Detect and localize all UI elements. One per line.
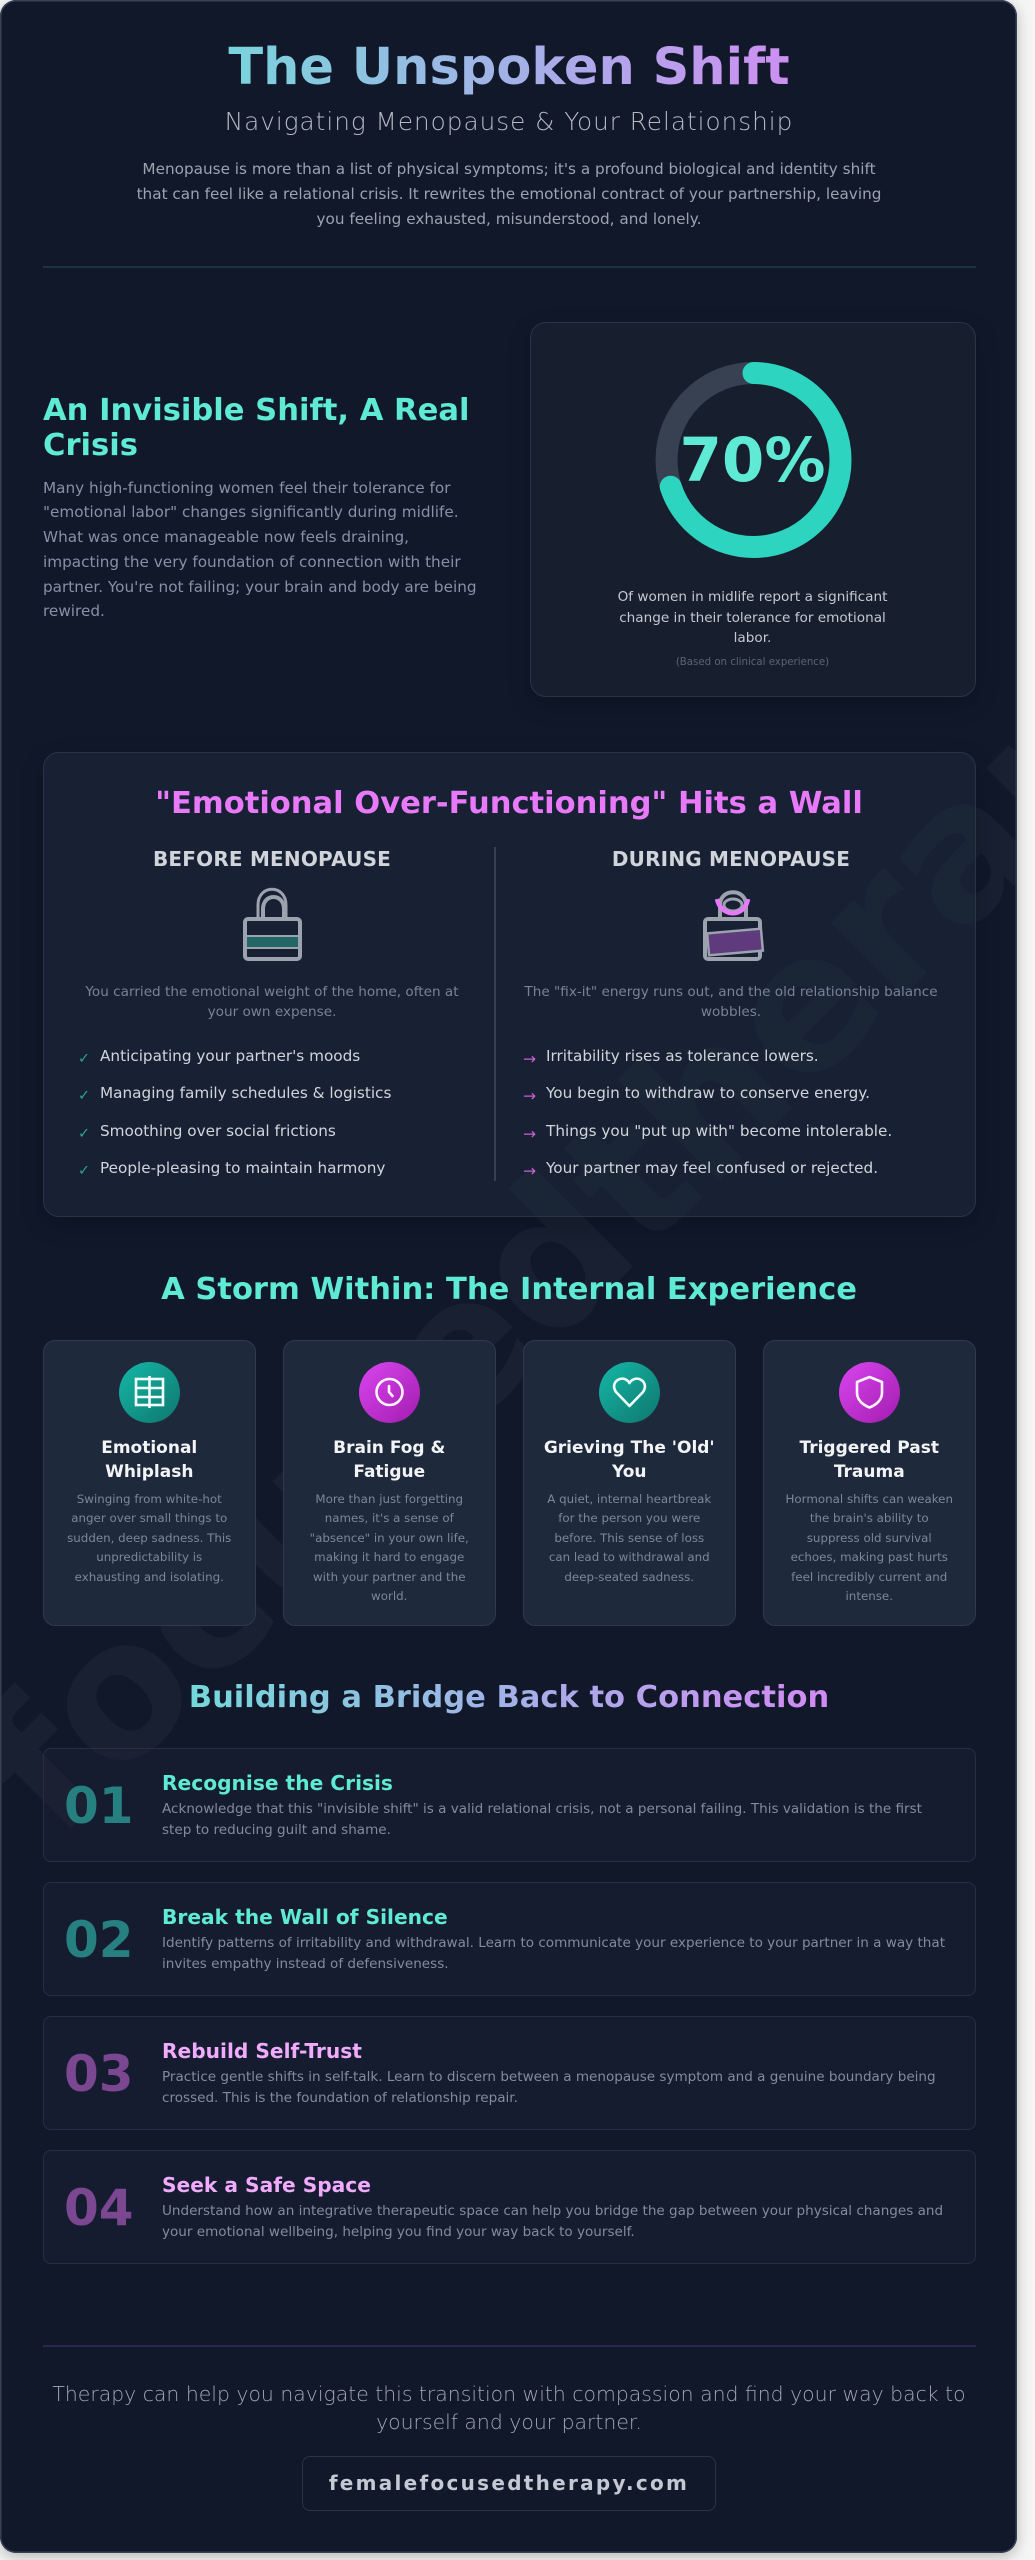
heading: building a bridge [43, 1678, 975, 1718]
title: The Unspoken Shift [228, 38, 790, 97]
card text [67, 1492, 231, 1584]
step text: Practice gentle shifts in self-talk. Learn to discern between a menopause symptom and a genuine boundary being [162, 2069, 936, 2085]
card text: before. This sense of loss [554, 1531, 704, 1545]
website button: femalefocusedtherapy.com [329, 2471, 689, 2495]
subtitle: Navigating Menopause & Your Relationship [225, 107, 793, 136]
step text: Understand how an integrative therapeutic space can help you bridge the gap between your physical changes and [162, 2203, 943, 2219]
step title: Recognise the Crisis [162, 1771, 393, 1795]
paragraph: invisible shift: What was once manageable now feels draining, [43, 528, 409, 546]
before description [85, 984, 459, 1020]
step title: Seek a Safe Space [162, 2173, 371, 2197]
card text: with your partner and the [313, 1570, 466, 1584]
card text [547, 1492, 711, 1584]
stat caption [618, 589, 888, 646]
step number: 03 [64, 2045, 134, 2103]
before heading: BEFORE MENOPAUSE [153, 847, 391, 871]
heading: invisible shift: Crisis [43, 428, 138, 462]
card title [333, 1438, 445, 1482]
list item: You begin to withdraw to conserve energy. [546, 1084, 870, 1102]
step text: Acknowledge that this "invisible shift" is a valid relational crisis, not a personal failing. This validation is the first [162, 1801, 922, 1817]
heading: building a bridge: Building a Bridge Back to Connection [189, 1680, 829, 1714]
heading: invisible shift [43, 392, 469, 462]
stat caption: Of women in midlife report a significant [618, 589, 887, 605]
closing message: yourself and your partner. [376, 2410, 642, 2434]
during list [523, 1047, 892, 1180]
list item: Smoothing over social frictions [100, 1122, 336, 1140]
step text: your emotional wellbeing, helping you find your way back to yourself. [162, 2224, 635, 2240]
step 04 [42, 2150, 976, 2264]
website button [302, 2456, 716, 2511]
list item: Your partner may feel confused or rejected. [546, 1159, 878, 1177]
card title [799, 1438, 939, 1482]
step text: step to reducing guilt and shame. [162, 1822, 391, 1838]
step number: 04 [64, 2179, 134, 2237]
stat caption: labor. [734, 630, 771, 646]
donut chart: 70% [679, 425, 825, 496]
intro paragraph: Menopause is more than a list of physical symptoms; it's a profound biological and identity shift [142, 160, 876, 178]
list item: → [523, 1125, 536, 1143]
card: trauma [762, 1340, 976, 1626]
during description: wobbles. [701, 1004, 761, 1020]
donut chart [656, 362, 852, 558]
card text: exhausting and isolating. [75, 1570, 224, 1584]
paragraph: invisible shift: partner. You're not failing; your brain and body are being [43, 578, 477, 596]
card text: A quiet, internal heartbreak [547, 1492, 711, 1506]
card text: the brain's ability to [810, 1511, 929, 1525]
card title: Fatigue [353, 1462, 425, 1482]
step title: Rebuild Self-Trust [162, 2039, 362, 2063]
list item: ✓ [78, 1088, 90, 1104]
list item: Irritability rises as tolerance lowers. [546, 1047, 819, 1065]
during heading: DURING MENOPAUSE [612, 847, 850, 871]
step number: 02 [64, 1911, 134, 1969]
list item: People-pleasing to maintain harmony [100, 1159, 385, 1177]
list item: ✓ [78, 1163, 90, 1179]
card title: Whiplash [105, 1462, 193, 1482]
list item: ✓ [78, 1126, 90, 1142]
card title: Brain Fog & [333, 1438, 445, 1458]
paragraph: invisible shift: impacting the very foundation of connection with their [43, 553, 461, 571]
intro paragraph: that can feel like a relational crisis. It rewrites the emotional contract of your partnership, leaving [137, 185, 881, 203]
heading: emotional over-functioning: "Emotional Over-Functioning" Hits a Wall [155, 786, 863, 821]
stat caption: change in their tolerance for emotional [619, 610, 886, 626]
panel: 70 percent stat [530, 322, 976, 697]
icon: during lock [703, 890, 764, 961]
card title [101, 1438, 197, 1482]
paragraph: invisible shift: Many high-functioning women feel their tolerance for [43, 478, 450, 496]
list item: → [523, 1050, 536, 1068]
step text [162, 1935, 945, 1972]
card text: echoes, making past hurts [791, 1550, 948, 1564]
card text: for the person you were [558, 1511, 700, 1525]
title [43, 36, 975, 100]
card text: intense. [846, 1589, 893, 1603]
card text: making it hard to engage [314, 1550, 464, 1564]
icon: clock [358, 1362, 420, 1423]
card title: Trauma [834, 1462, 905, 1482]
heading: storm within: A Storm Within: The Internal Experience [161, 1272, 857, 1306]
heading: invisible shift: An Invisible Shift, A Real [43, 392, 469, 428]
card text: unpredictability is [96, 1550, 202, 1564]
step text: invites empathy instead of defensiveness. [162, 1956, 449, 1972]
paragraph: invisible shift: rewired. [43, 602, 105, 620]
step 03 [42, 2016, 976, 2130]
before description: your own expense. [208, 1004, 336, 1020]
column divider [494, 847, 496, 1181]
card text: anger over small things to [71, 1511, 227, 1525]
card: brain fog [282, 1340, 496, 1626]
paragraph: invisible shift [43, 478, 477, 620]
list item: ✓ [78, 1051, 90, 1067]
before description: You carried the emotional weight of the home, often at [85, 984, 459, 1000]
step text [162, 2069, 936, 2106]
card text: feel incredibly current and [791, 1570, 947, 1584]
paragraph: invisible shift: "emotional labor" changes significantly during midlife. [43, 503, 459, 521]
card text: deep-seated sadness. [564, 1570, 694, 1584]
panel: emotional over-functioning [42, 752, 976, 1217]
step text: Identify patterns of irritability and withdrawal. Learn to communicate your experience to your partner in a way that [162, 1935, 945, 1951]
step text [162, 1801, 922, 1838]
list item: Anticipating your partner's moods [100, 1047, 360, 1065]
card text: Swinging from white-hot [77, 1492, 222, 1506]
card text [786, 1492, 953, 1603]
card text: More than just forgetting [315, 1492, 463, 1506]
icon: before lock [243, 888, 302, 961]
card: emotional whiplash [42, 1340, 256, 1626]
step text [162, 2203, 943, 2240]
intro paragraph [137, 160, 881, 228]
card text: suppress old survival [807, 1531, 932, 1545]
during description [524, 984, 938, 1020]
step 02 [42, 1882, 976, 1996]
card text: can lead to withdrawal and [549, 1550, 710, 1564]
card title: Emotional [101, 1438, 197, 1458]
closing message: Therapy can help you navigate this transition with compassion and find your way back to [52, 2382, 966, 2406]
list item: Managing family schedules & logistics [100, 1084, 391, 1102]
card text: sudden, deep sadness. This [67, 1531, 231, 1545]
card title [544, 1438, 715, 1482]
step text: crossed. This is the foundation of relationship repair. [162, 2090, 518, 2106]
list item: → [523, 1087, 536, 1105]
step number: 01 [64, 1777, 134, 1835]
card text: Hormonal shifts can weaken [786, 1492, 953, 1506]
list item: → [523, 1162, 536, 1180]
card text [310, 1492, 469, 1603]
card title: Grieving The 'Old' [544, 1438, 715, 1458]
intro paragraph: you feeling exhausted, misunderstood, and lonely. [317, 210, 701, 228]
card text: "absence" in your own life, [310, 1531, 469, 1545]
card: grieving [522, 1340, 736, 1626]
closing message [52, 2382, 966, 2434]
before list [78, 1047, 391, 1179]
stat source: (Based on clinical experience) [676, 657, 829, 668]
icon: table [118, 1362, 180, 1423]
icon: shield [838, 1362, 900, 1423]
icon: heart [598, 1362, 660, 1423]
card title: Triggered Past [799, 1438, 939, 1458]
card title: You [612, 1462, 647, 1482]
card text: names, it's a sense of [325, 1511, 454, 1525]
step title: Break the Wall of Silence [162, 1905, 448, 1929]
list item: Things you "put up with" become intolerable. [546, 1122, 892, 1140]
step 01 [42, 1748, 976, 1862]
card text: world. [371, 1589, 407, 1603]
during description: The "fix-it" energy runs out, and the old relationship balance [524, 984, 938, 1000]
